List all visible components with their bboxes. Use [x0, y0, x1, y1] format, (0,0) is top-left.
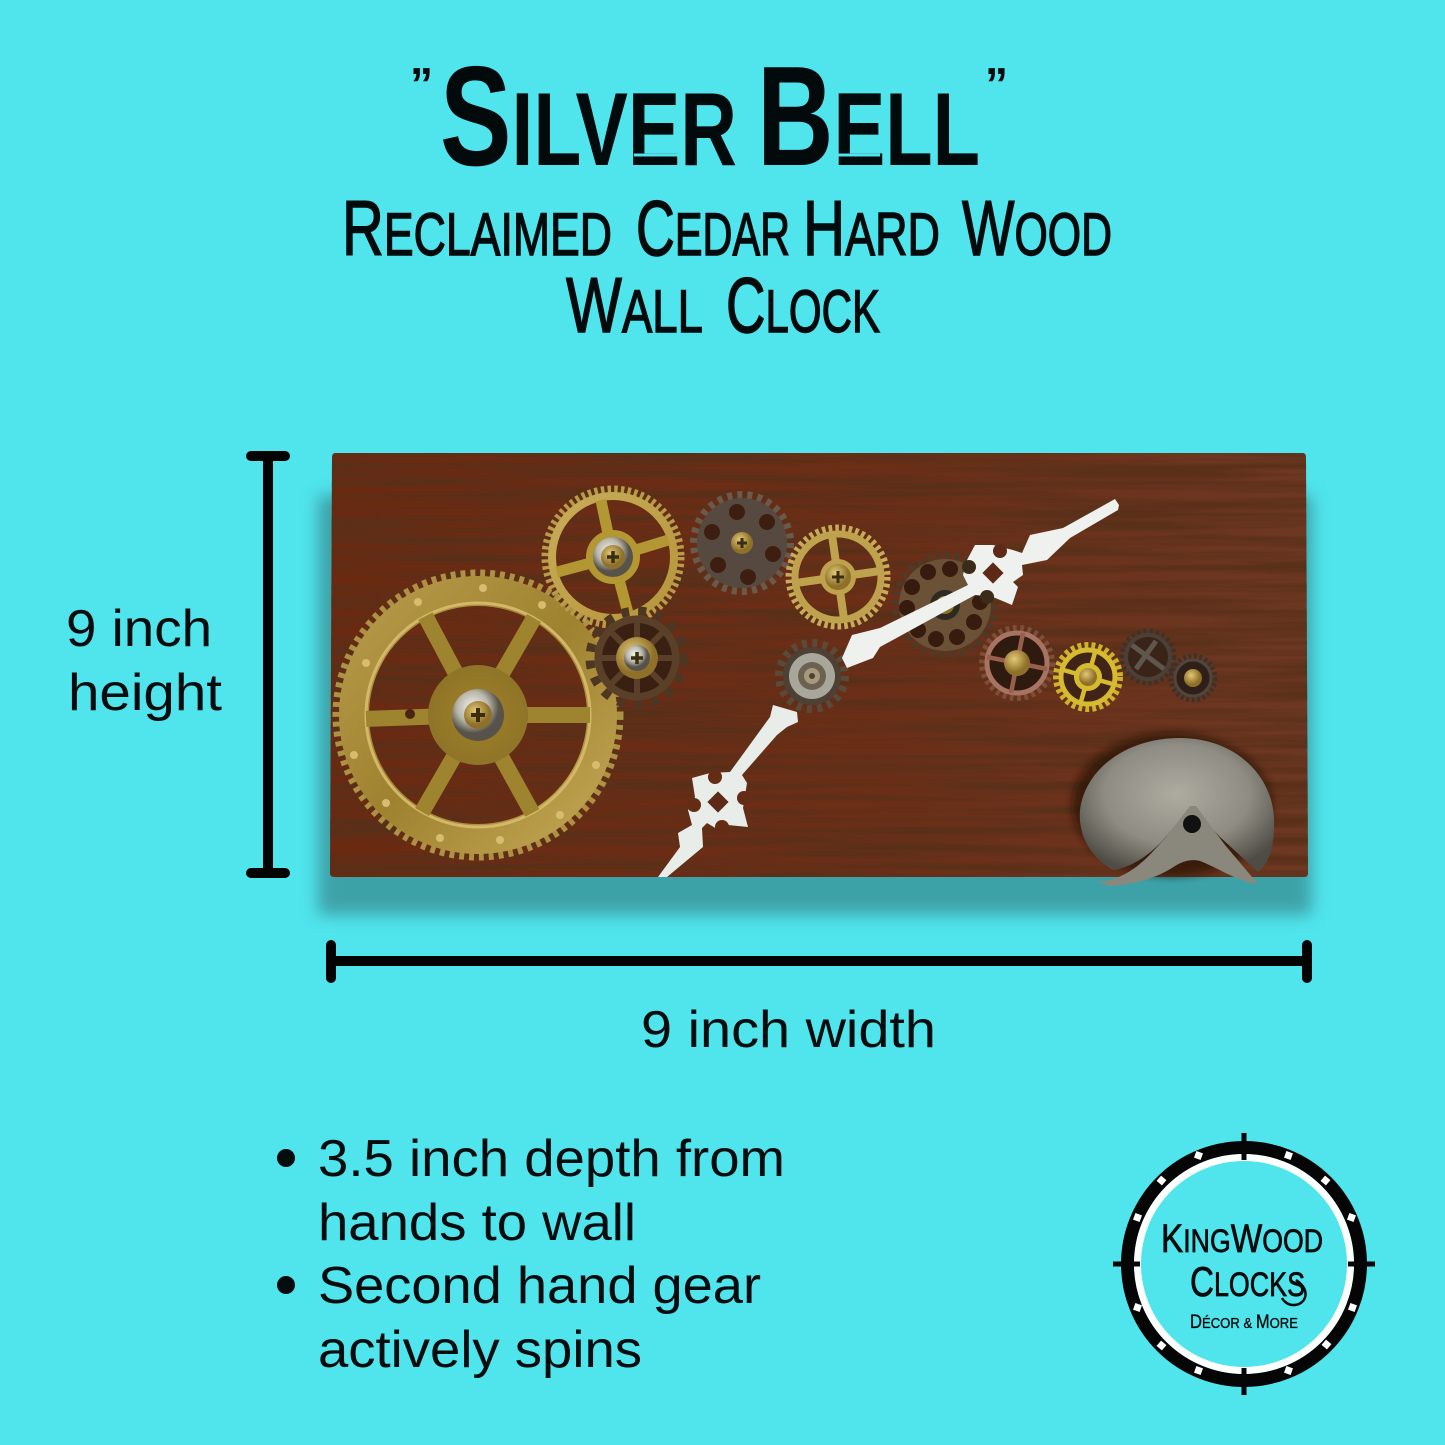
clock: wood plaque with gears — [325, 450, 1315, 886]
title: Silver Bell: BELL — [757, 37, 980, 196]
height dimension bar — [251, 456, 285, 873]
smallest gear — [1171, 656, 1215, 700]
bullet list: hands to wall — [318, 1194, 636, 1252]
height label: 9 inch — [66, 600, 212, 658]
rusty gear — [590, 611, 684, 705]
small brass gear — [789, 528, 887, 626]
subtitle: Reclaimed Cedar Hard Wood: WOOD — [962, 184, 1112, 272]
silver second hand gear — [779, 643, 845, 709]
upper brass gear — [545, 489, 681, 625]
bullet list — [277, 1130, 785, 1379]
bullet list: Second hand gear — [318, 1257, 761, 1315]
width label: 9 inch width — [641, 1001, 936, 1059]
subtitle: Wall Clock: CLOCK — [726, 261, 880, 349]
white minute hand — [842, 499, 1119, 668]
clock shadow — [318, 495, 1312, 915]
subtitle: Reclaimed Cedar Hard Wood — [342, 184, 1112, 272]
subtitle: Reclaimed Cedar Hard Wood: CEDAR — [636, 184, 790, 272]
title: Silver Bell — [410, 37, 1008, 196]
logo: KingWood Clocks: KINGWOOD — [1161, 1217, 1323, 1261]
logo: KingWood Clocks — [1113, 1133, 1375, 1395]
title: Silver Bell: ” — [410, 58, 433, 110]
silver bell — [1072, 733, 1274, 886]
wood plaque — [325, 450, 1315, 880]
subtitle: Reclaimed Cedar Hard Wood: RECLAIMED — [342, 184, 612, 272]
dark pewter gear — [694, 495, 790, 591]
title: Silver Bell: ” — [985, 58, 1008, 110]
logo: KingWood Clocks: CLOCKS — [1190, 1258, 1305, 1305]
bullet list: 3.5 inch depth from — [318, 1130, 785, 1188]
dark small gear — [1122, 631, 1174, 683]
subtitle: Wall Clock: WALL — [566, 261, 703, 349]
height label — [66, 600, 223, 722]
title: Silver Bell: SILVER — [440, 37, 737, 196]
white hour hand — [658, 705, 798, 877]
height label: height — [68, 664, 223, 722]
bullet list: actively spins — [318, 1321, 642, 1379]
bronze gear with holes — [896, 556, 994, 654]
copper gear — [982, 628, 1052, 698]
subtitle: Reclaimed Cedar Hard Wood: HARD — [803, 184, 940, 272]
large brass gear — [337, 574, 619, 856]
width dimension bar — [331, 945, 1307, 978]
yellow gear — [1056, 645, 1120, 709]
subtitle: Wall Clock — [566, 261, 880, 349]
logo: KingWood Clocks: DÉCOR & MORE — [1190, 1312, 1298, 1333]
